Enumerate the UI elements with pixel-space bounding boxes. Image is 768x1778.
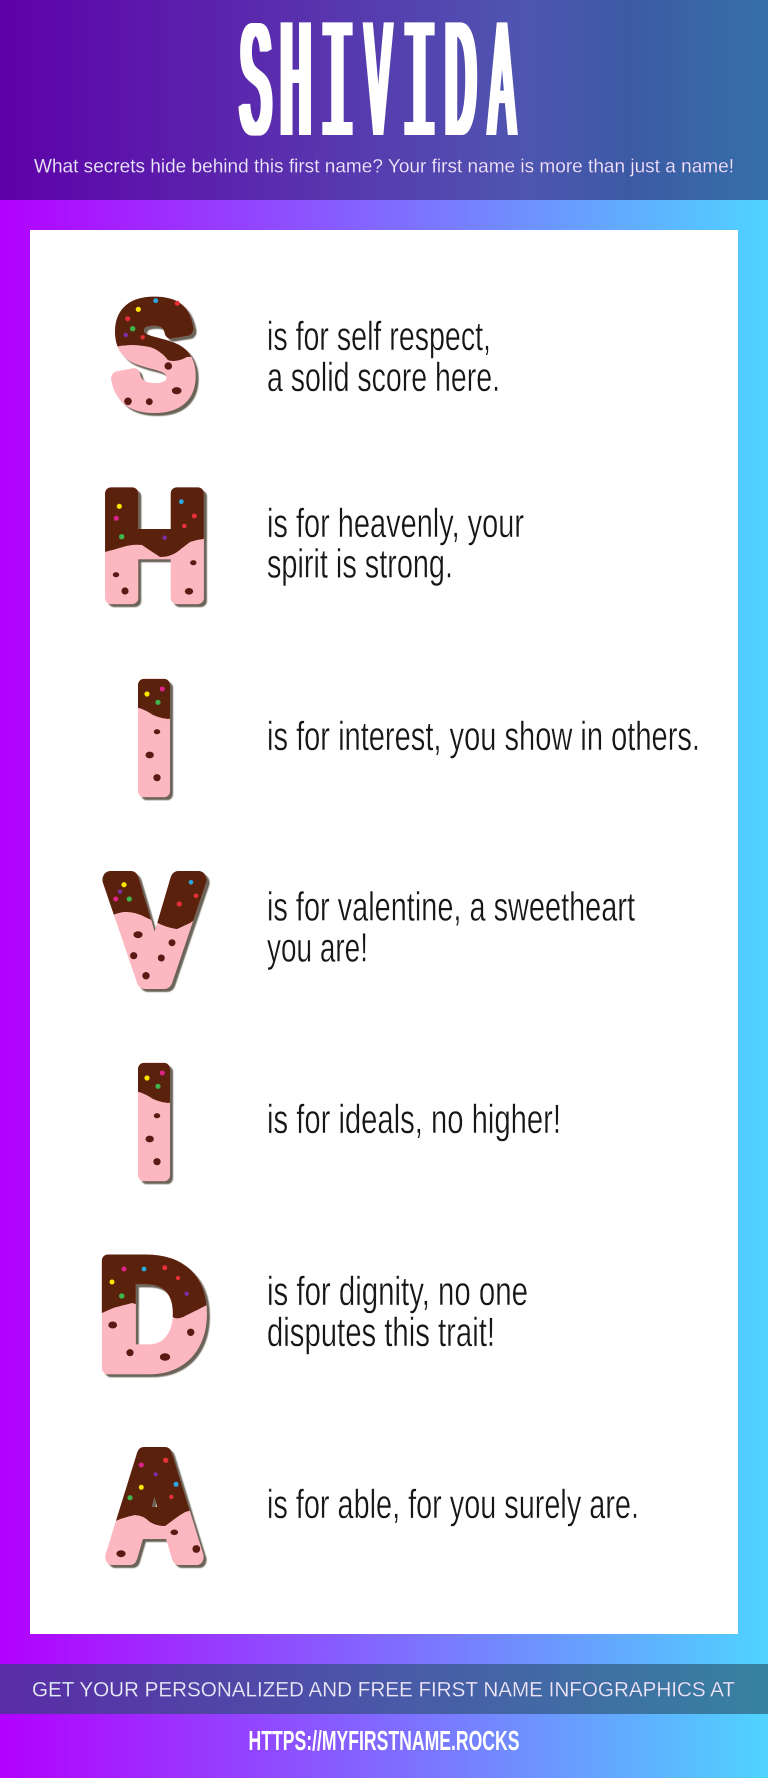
icon: chocolate letter A: A (109, 1424, 200, 1589)
icon: chocolate letter H: H (101, 460, 208, 630)
icon: chocolate letter V: V (110, 848, 199, 1011)
text: dignity: is for dignity, no one (267, 1268, 528, 1314)
icon: chocolate letter I (138, 678, 174, 801)
title: SHIVIDA: S (240, 0, 272, 184)
title: SHIVIDA: D (445, 0, 476, 188)
footer band (0, 1664, 768, 1714)
footer url: HTTPS://MYFIRSTNAME.ROCKS (248, 1725, 520, 1756)
icon: chocolate letter I: I (134, 1036, 174, 1208)
text: self respect (267, 313, 500, 400)
icon: chocolate letter H (105, 487, 208, 608)
text: self respect: is for self respect, (267, 313, 491, 359)
text: dignity (267, 1268, 528, 1355)
text: heavenly: spirit is strong. (267, 540, 453, 586)
icon: chocolate letter I (138, 1062, 174, 1185)
title: SHIVIDA: H (280, 0, 312, 188)
icon: chocolate letter V: V (110, 848, 199, 1011)
text: self respect: a solid score here. (267, 354, 500, 400)
row I (134, 652, 700, 824)
icon: chocolate letter S: S (114, 276, 194, 436)
row H (105, 487, 524, 608)
row D (102, 1254, 527, 1378)
icon: chocolate letter A (105, 1447, 208, 1569)
row I second (134, 1036, 561, 1208)
icon: chocolate letter H: H (101, 460, 208, 630)
icon: chocolate letter I: I (134, 652, 174, 824)
icon: chocolate letter I: I (134, 1036, 174, 1208)
subtitle: What secrets hide behind this first name? Your first name is more than just a name! (34, 156, 734, 178)
text: heavenly: is for heavenly, your (267, 500, 524, 546)
icon: chocolate letter D: D (98, 1227, 207, 1401)
text: heavenly (267, 500, 524, 586)
row V (110, 848, 635, 1011)
icon: chocolate letter A: A (109, 1424, 200, 1589)
title: SHIVIDA: I (402, 0, 437, 187)
row A (105, 1447, 636, 1569)
footer call to action: GET YOUR PERSONALIZED AND FREE FIRST NAME INFOGRAPHICS AT (32, 1677, 735, 1702)
icon: chocolate letter D: D (98, 1227, 207, 1401)
row S (111, 296, 498, 417)
title: SHIVIDA (240, 0, 515, 188)
text: valentine (267, 884, 635, 971)
text: ideals: is for ideals, no higher! (267, 1096, 561, 1142)
header band (0, 0, 768, 200)
icon: chocolate letter S: S (114, 276, 194, 436)
text: valentine: you are! (267, 925, 368, 971)
icon: chocolate letter I: I (134, 652, 174, 824)
white content panel (30, 230, 738, 1634)
title: SHIVIDA: I (320, 0, 355, 187)
text: dignity: disputes this trait! (267, 1309, 495, 1355)
icon: chocolate letter D (102, 1254, 211, 1378)
